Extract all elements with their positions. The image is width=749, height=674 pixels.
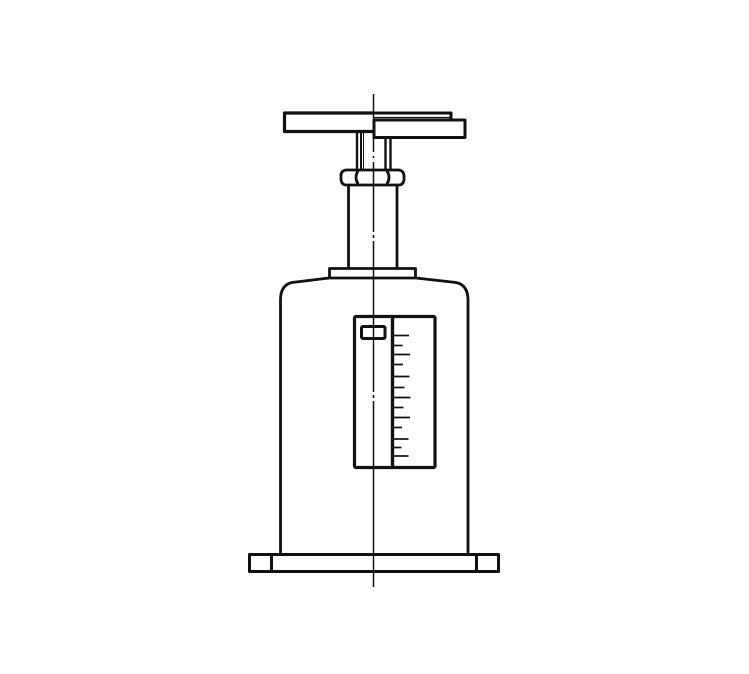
column [348, 185, 397, 268]
hex nut [341, 170, 404, 185]
centerline [372, 94, 374, 587]
threaded stem [357, 132, 390, 169]
top plate [284, 113, 465, 138]
gauge divider [391, 316, 394, 468]
base plate [250, 554, 498, 572]
gauge frame [354, 316, 435, 468]
scale ticks [393, 336, 410, 456]
collar [330, 268, 416, 278]
jack body [280, 278, 468, 554]
gauge window [354, 316, 435, 468]
indicator box [362, 326, 385, 338]
